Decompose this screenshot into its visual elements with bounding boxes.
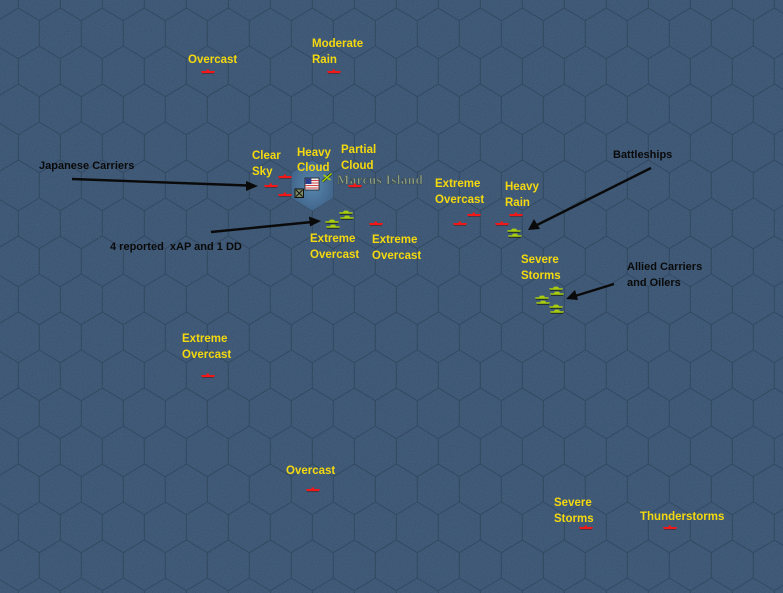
- weather labels: Clear: [252, 150, 281, 162]
- red Japanese ship markers: [201, 70, 677, 529]
- weather labels: Severe: [521, 254, 559, 266]
- weather labels: Extreme: [435, 178, 480, 190]
- annotation labels: Allied Carriers: [627, 261, 702, 273]
- weather labels: Storms: [521, 270, 561, 282]
- annotation labels: 4 reported xAP and 1 DD: [110, 241, 242, 253]
- weather labels: Thunderstorms: [640, 511, 724, 523]
- weather labels: Overcast: [435, 194, 484, 206]
- weather labels: Heavy: [297, 147, 331, 159]
- weather labels: Rain: [505, 197, 530, 209]
- weather labels: Heavy: [505, 181, 539, 193]
- weather labels: Cloud: [297, 162, 330, 174]
- green Allied ship markers: [325, 211, 564, 313]
- weather labels: Overcast: [286, 465, 335, 477]
- weather labels: Overcast: [310, 249, 359, 261]
- weather labels: Extreme: [372, 234, 417, 246]
- weather labels: Extreme: [182, 333, 227, 345]
- weather labels: Overcast: [182, 349, 231, 361]
- annotation labels: Battleships: [613, 149, 672, 161]
- Marcus Island highlighted hex: [291, 160, 333, 211]
- icon: American flag: [305, 178, 319, 190]
- weather labels: Overcast: [372, 250, 421, 262]
- weather labels: Cloud: [341, 160, 374, 172]
- arrow: to Battleships: [528, 168, 651, 230]
- weather labels: [182, 38, 724, 525]
- weather labels: Sky: [252, 166, 273, 178]
- weather labels: Severe: [554, 497, 592, 509]
- label: Marcus Island: Marcus Island: [337, 172, 423, 187]
- weather labels: Partial: [341, 144, 376, 156]
- weather labels: Moderate: [312, 38, 363, 50]
- arrow: to Allied Carriers and Oilers: [566, 284, 614, 300]
- icon: aircraft: [322, 174, 332, 182]
- arrow: to xAP and DD: [211, 216, 321, 232]
- annotation labels: Japanese Carriers: [39, 160, 134, 172]
- weather labels: Rain: [312, 54, 337, 66]
- weather labels: Extreme: [310, 233, 355, 245]
- weather labels: Storms: [554, 513, 594, 525]
- icon: base supply box: [295, 189, 304, 198]
- weather labels: Overcast: [188, 54, 237, 66]
- arrow: to Japanese Carriers: [72, 179, 258, 191]
- annotation labels: and Oilers: [627, 277, 681, 289]
- annotation labels: [39, 149, 702, 289]
